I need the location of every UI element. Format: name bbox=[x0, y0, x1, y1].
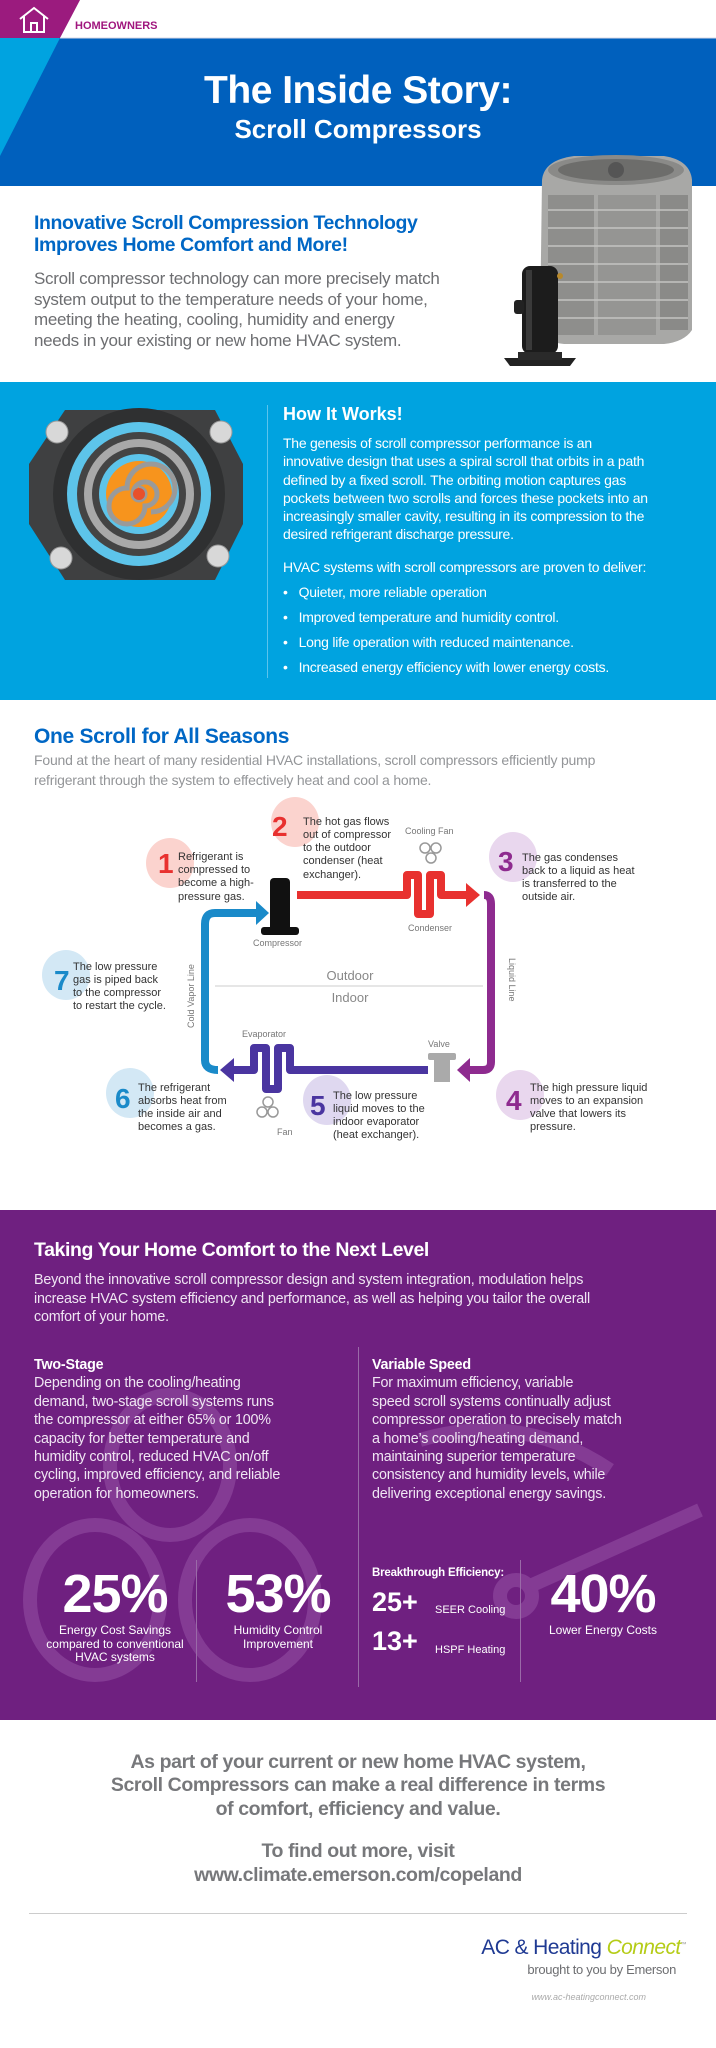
labels: Compressor bbox=[253, 938, 302, 948]
text: closing statement: of comfort, efficiency and value. bbox=[216, 1798, 500, 1820]
step texts: back to a liquid as heat bbox=[522, 865, 635, 877]
text: two-stage: operation for homeowners. bbox=[34, 1486, 199, 1502]
step texts: liquid moves to the bbox=[333, 1103, 425, 1115]
labels: Liquid Line bbox=[507, 958, 517, 1002]
logo: AC & Heating Connect: www.ac-heatingconnect.com bbox=[531, 1992, 646, 2002]
text: next level intro: increase HVAC system efficiency and performance, as well as helping you tailor the overall bbox=[34, 1290, 590, 1306]
panel: how it works bbox=[0, 382, 716, 700]
labels: Evaporator bbox=[242, 1029, 286, 1039]
step texts: The refrigerant bbox=[138, 1082, 210, 1094]
text: two-stage: cycling, improved efficiency, and reliable bbox=[34, 1467, 280, 1483]
text: genesis paragraph bbox=[283, 435, 648, 542]
step texts: exchanger). bbox=[303, 869, 361, 881]
diagram: refrigerant cycle: Outdoor bbox=[327, 968, 374, 983]
step texts: to the outdoor bbox=[303, 842, 371, 854]
numbers bbox=[54, 811, 522, 1121]
text: variable speed: maintaining superior temperature bbox=[372, 1449, 575, 1465]
step texts: outside air. bbox=[522, 891, 575, 903]
fans bbox=[257, 843, 441, 1117]
indigo line bbox=[232, 1048, 428, 1089]
numbers: 3 bbox=[498, 846, 514, 877]
step texts: the inside air and bbox=[138, 1108, 222, 1120]
text: find out more bbox=[194, 1840, 522, 1886]
labels bbox=[186, 826, 517, 1137]
labels: Cold Vapor Line bbox=[186, 964, 196, 1028]
labels: Cooling Fan bbox=[405, 826, 454, 836]
diagram: refrigerant cycle: Indoor bbox=[332, 990, 369, 1005]
text: genesis paragraph: The genesis of scroll compressor performance is an bbox=[283, 435, 592, 451]
panel: next level bbox=[0, 1210, 716, 1720]
logo: AC & Heating Connect: brought to you by Emerson bbox=[527, 1962, 676, 1977]
text: genesis paragraph: desired refrigerant discharge pressure. bbox=[283, 526, 514, 542]
text: variable speed: a home’s cooling/heating demand, bbox=[372, 1431, 583, 1447]
logo: AC & Heating Connect bbox=[481, 1936, 686, 2002]
text: variable speed: Variable Speed bbox=[372, 1357, 471, 1373]
numbers: 4 bbox=[506, 1085, 522, 1116]
label: homeowners: HOMEOWNERS bbox=[75, 20, 158, 32]
diagram: refrigerant cycle bbox=[42, 797, 647, 1141]
text: benefits list: • Improved temperature and humidity control. bbox=[283, 609, 559, 625]
heading: next level: Taking Your Home Comfort to the Next Level bbox=[34, 1239, 429, 1261]
stat: breakthrough efficiency bbox=[372, 1567, 505, 1656]
image: AC unit bbox=[540, 155, 692, 344]
blue line bbox=[205, 913, 258, 1070]
step texts: gas is piped back bbox=[73, 974, 158, 986]
text: benefits list: • Quieter, more reliable operation bbox=[283, 584, 487, 600]
labels: Fan bbox=[277, 1127, 293, 1137]
step texts: The hot gas flows bbox=[303, 816, 390, 828]
step texts: absorbs heat from bbox=[138, 1095, 227, 1107]
text: variable speed: consistency and humidity levels, while bbox=[372, 1467, 605, 1483]
labels: Valve bbox=[428, 1039, 450, 1049]
stat: breakthrough efficiency: HSPF Heating bbox=[435, 1644, 505, 1656]
text: next level intro: Beyond the innovative scroll compressor design and system integration, modulation helps bbox=[34, 1272, 583, 1288]
stat: 25% bbox=[46, 1564, 184, 1664]
step texts: pressure gas. bbox=[178, 891, 245, 903]
text: two-stage bbox=[34, 1357, 280, 1502]
stat: 40%: 40% bbox=[550, 1564, 656, 1624]
intro paragraph: Scroll compressor technology can more precisely match bbox=[34, 269, 440, 288]
stat: 53%: 53% bbox=[225, 1564, 331, 1624]
step texts: The high pressure liquid bbox=[530, 1082, 647, 1094]
logo: AC & Heating Connect: AC & Heating Connect™ bbox=[481, 1936, 686, 1959]
text: two-stage: Two-Stage bbox=[34, 1357, 103, 1373]
step texts: Refrigerant is bbox=[178, 851, 244, 863]
numbers: 5 bbox=[310, 1090, 326, 1121]
heading: how it works: How It Works! bbox=[283, 404, 403, 424]
text: variable speed bbox=[372, 1357, 622, 1502]
text: benefits list bbox=[283, 559, 646, 675]
title bbox=[204, 69, 512, 144]
text: two-stage: capacity for better temperature and bbox=[34, 1431, 250, 1447]
decorative fan shapes bbox=[23, 1388, 703, 1682]
title: Scroll Compressors bbox=[234, 114, 482, 144]
text: benefits list: • Increased energy efficiency with lower energy costs. bbox=[283, 659, 609, 675]
stat: breakthrough efficiency: 13+ bbox=[372, 1626, 418, 1656]
step texts: become a high- bbox=[178, 877, 254, 889]
intro paragraph bbox=[34, 269, 440, 350]
stat: 53% bbox=[225, 1564, 331, 1650]
intro paragraph: meeting the heating, cooling, humidity and energy bbox=[34, 310, 394, 329]
stat: 25%: compared to conventional bbox=[46, 1636, 184, 1650]
step texts: is transferred to the bbox=[522, 878, 617, 890]
step texts: pressure. bbox=[530, 1121, 576, 1133]
text: genesis paragraph: pockets between two scrolls and forces these pockets into an bbox=[283, 490, 648, 506]
heading: one scroll: One Scroll for All Seasons bbox=[34, 725, 289, 748]
circles bbox=[42, 797, 544, 1125]
text: closing statement bbox=[111, 1751, 605, 1820]
text: variable speed: compressor operation to precisely match bbox=[372, 1412, 622, 1428]
text: find out more: www.climate.emerson.com/copeland bbox=[194, 1864, 522, 1886]
text: two-stage: the compressor at either 65% or 100% bbox=[34, 1412, 271, 1428]
compressor bbox=[261, 878, 299, 935]
step texts: The low pressure bbox=[333, 1090, 417, 1102]
icon: house bbox=[19, 6, 49, 33]
stat: 53%: Improvement bbox=[243, 1636, 313, 1650]
labels: Condenser bbox=[408, 923, 452, 933]
step texts: out of compressor bbox=[303, 829, 391, 841]
numbers: 7 bbox=[54, 965, 70, 996]
headline: innovative: Improves Home Comfort and More! bbox=[34, 234, 348, 256]
text: variable speed: delivering exceptional energy savings. bbox=[372, 1486, 606, 1502]
text: genesis paragraph: defined by a fixed scroll. The orbiting motion captures gas bbox=[283, 472, 626, 488]
stat: 25%: Energy Cost Savings bbox=[59, 1623, 171, 1637]
intro paragraph: needs in your existing or new home HVAC system. bbox=[34, 330, 401, 350]
valve bbox=[428, 1053, 456, 1082]
header band bbox=[0, 0, 716, 186]
numbers: 1 bbox=[158, 848, 174, 879]
text: benefits list: HVAC systems with scroll compressors are proven to deliver: bbox=[283, 559, 646, 575]
text: benefits list: • Long life operation with reduced maintenance. bbox=[283, 634, 574, 650]
title: The Inside Story: bbox=[204, 69, 512, 112]
text: genesis paragraph: increasingly smaller cavity, resulting in its compression to the bbox=[283, 508, 644, 524]
intro paragraph: system output to the temperature needs of your home, bbox=[34, 290, 428, 308]
step texts: to the compressor bbox=[73, 987, 161, 999]
step texts: The low pressure bbox=[73, 961, 157, 973]
step texts: condenser (heat bbox=[303, 855, 382, 867]
step texts: compressed to bbox=[178, 864, 250, 876]
text: two-stage: Depending on the cooling/heating bbox=[34, 1375, 241, 1391]
text: one scroll intro: refrigerant through the system to effectively heat and cool a home. bbox=[34, 772, 431, 788]
image: compressor bbox=[504, 266, 576, 366]
text: one scroll intro: Found at the heart of many residential HVAC installations, scroll compressors efficiently pump bbox=[34, 752, 595, 768]
stat: 25%: HVAC systems bbox=[75, 1650, 155, 1664]
stat: breakthrough efficiency: Breakthrough Efficiency: bbox=[372, 1567, 504, 1579]
step texts: to restart the cycle. bbox=[73, 1000, 166, 1012]
step texts: moves to an expansion bbox=[530, 1095, 643, 1107]
text: next level intro: comfort of your home. bbox=[34, 1309, 169, 1325]
step texts: valve that lowers its bbox=[530, 1108, 626, 1120]
stat: 25%: 25% bbox=[62, 1564, 168, 1624]
numbers: 2 bbox=[272, 811, 288, 842]
stat: 40%: Lower Energy Costs bbox=[549, 1623, 657, 1637]
step texts: The gas condenses bbox=[522, 852, 619, 864]
headline: innovative bbox=[34, 212, 418, 256]
step texts: (heat exchanger). bbox=[333, 1129, 419, 1141]
purple line bbox=[468, 895, 491, 1070]
text: next level intro bbox=[34, 1272, 590, 1325]
text: variable speed: speed scroll systems continually adjust bbox=[372, 1394, 611, 1410]
text: genesis paragraph: innovative design that uses a spiral scroll that orbits in a path bbox=[283, 453, 644, 469]
stat: breakthrough efficiency: SEER Cooling bbox=[435, 1604, 505, 1616]
text: find out more: To find out more, visit bbox=[261, 1840, 455, 1862]
text: closing statement: Scroll Compressors can make a real difference in terms bbox=[111, 1774, 605, 1796]
stat: 53%: Humidity Control bbox=[234, 1623, 322, 1637]
text: variable speed: For maximum efficiency, variable bbox=[372, 1375, 573, 1391]
numbers: 6 bbox=[115, 1083, 131, 1114]
text: one scroll intro bbox=[34, 752, 595, 788]
step texts: indoor evaporator bbox=[333, 1116, 420, 1128]
icon: scroll bbox=[29, 408, 243, 580]
text: closing statement: As part of your current or new home HVAC system, bbox=[130, 1751, 586, 1773]
step texts bbox=[73, 816, 647, 1141]
text: two-stage: demand, two-stage scroll systems runs bbox=[34, 1394, 274, 1410]
text: two-stage: humidity control, reduced HVAC on/off bbox=[34, 1449, 268, 1465]
stat: breakthrough efficiency: 25+ bbox=[372, 1587, 418, 1617]
step texts: becomes a gas. bbox=[138, 1121, 216, 1133]
red line bbox=[297, 875, 468, 914]
headline: innovative: Innovative Scroll Compression Technology bbox=[34, 212, 417, 234]
